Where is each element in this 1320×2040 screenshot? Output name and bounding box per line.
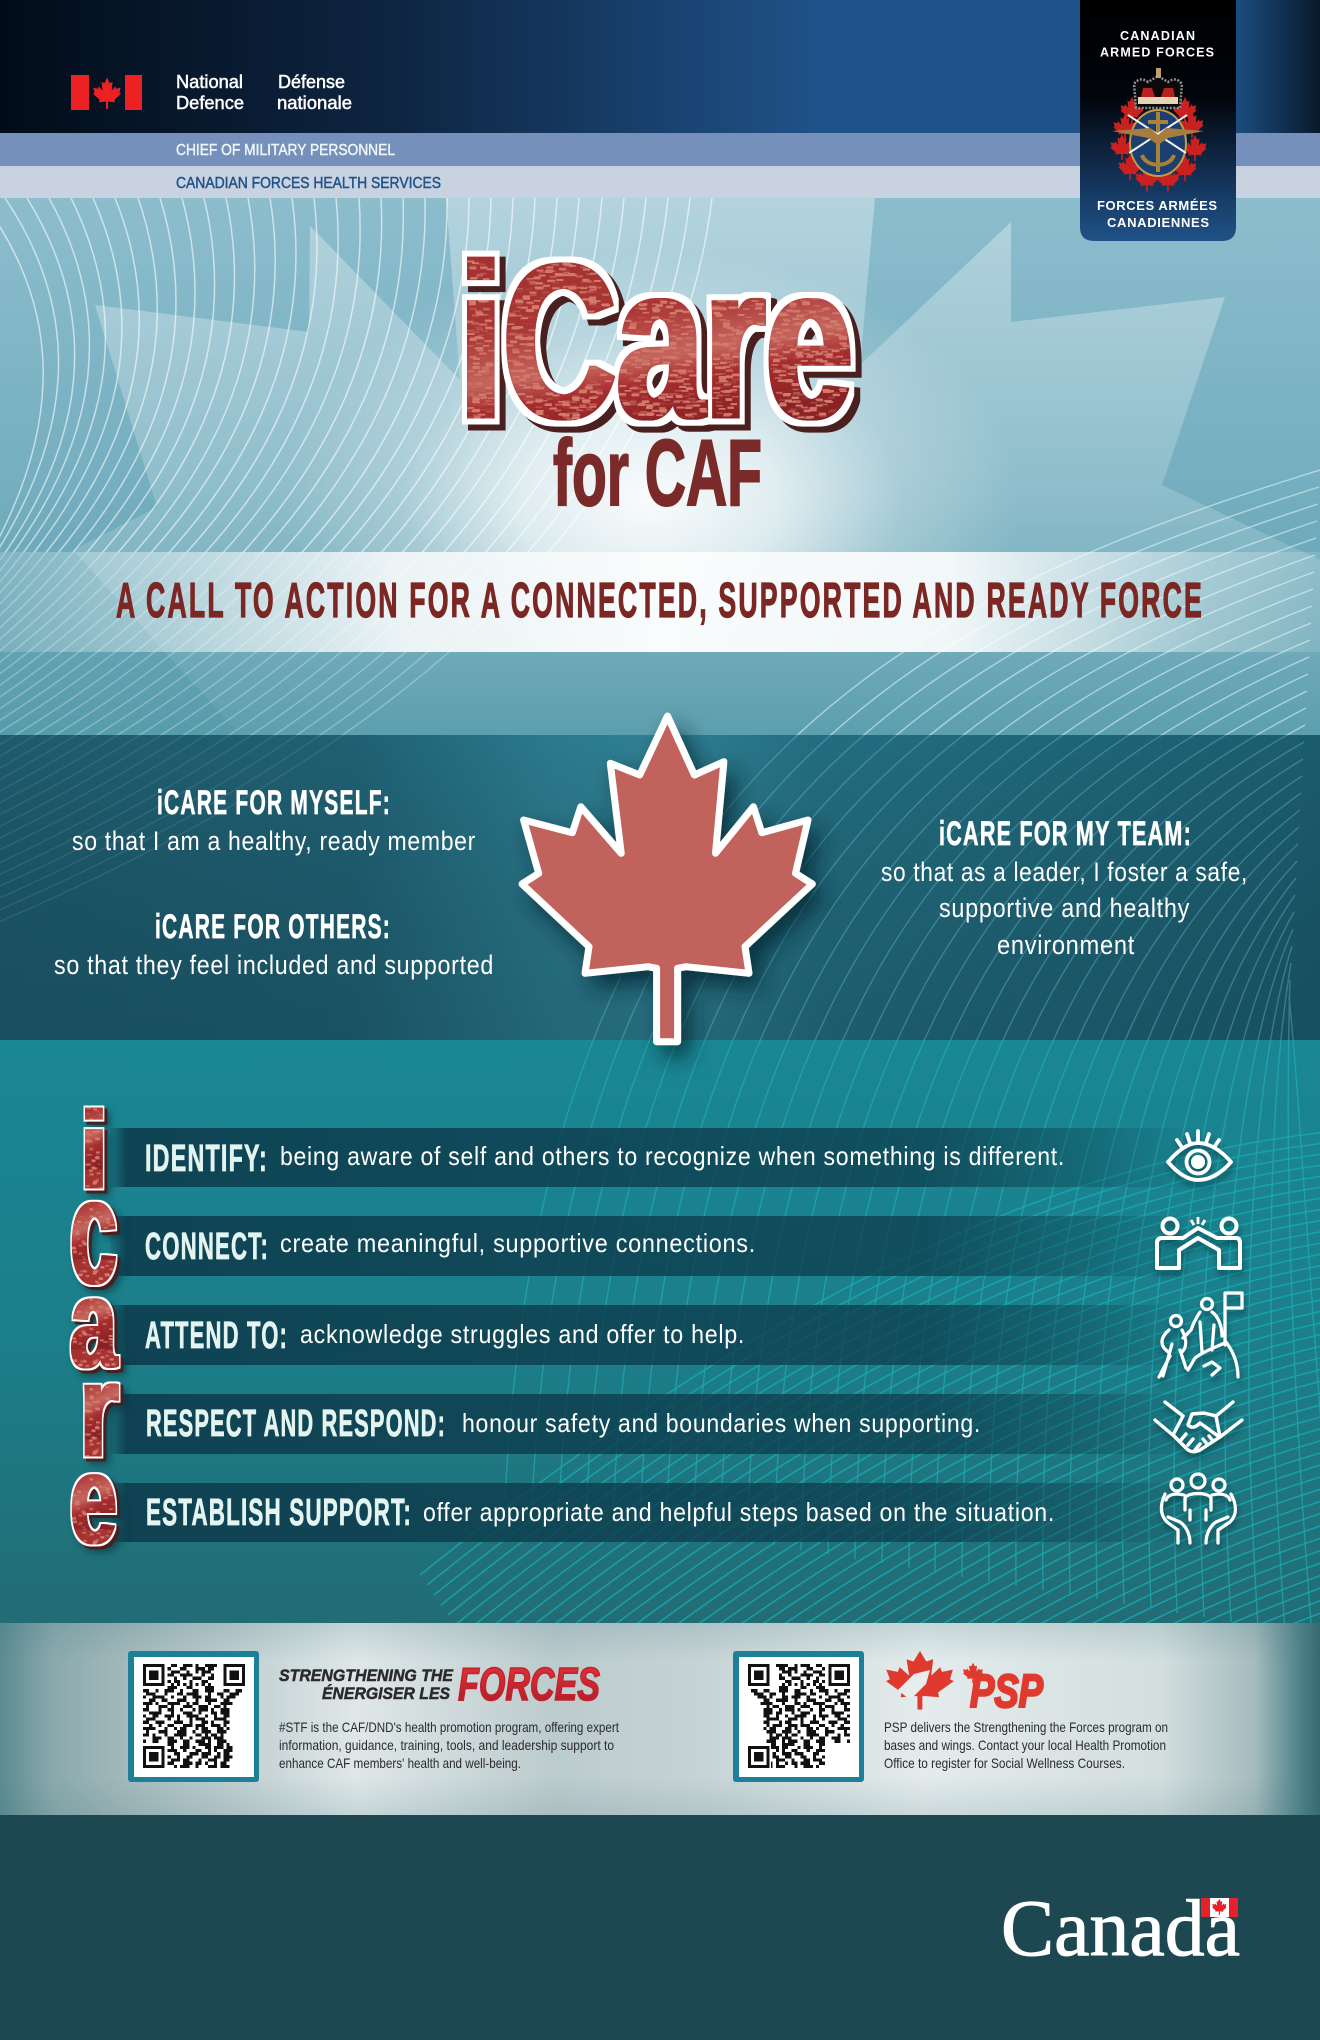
icon: people in hands xyxy=(1161,1474,1235,1543)
badge text bottom: FORCES ARMÉES xyxy=(1097,198,1217,213)
lower teal panel background xyxy=(0,1040,1320,1623)
acronym letters i c a r e: r xyxy=(79,1336,119,1485)
row: establish support: offer appropriate and helpful steps based on the situation. xyxy=(423,1497,1055,1527)
badge: canadian armed forces xyxy=(1080,0,1236,241)
text: iCare for myself: iCARE FOR MYSELF: xyxy=(157,784,391,822)
subtitle: for CAF: for CAF xyxy=(553,420,762,525)
logo: PSP xyxy=(886,1651,1043,1717)
logo: strengthening the forces: ÉNERGISER LES xyxy=(322,1684,451,1703)
crest xyxy=(1110,68,1207,191)
maple leaf xyxy=(522,716,812,1042)
row: establish support xyxy=(110,1483,1200,1542)
canada flag signature xyxy=(71,75,142,110)
department name xyxy=(176,72,352,113)
department name: nationale xyxy=(277,93,352,113)
text: iCare for my team xyxy=(881,815,1248,960)
footer band xyxy=(0,1815,1320,2040)
panel: dark band xyxy=(0,735,1320,1040)
badge text bottom: CANADIENNES xyxy=(1107,215,1209,230)
text: iCare for others xyxy=(54,908,494,980)
icon: high five xyxy=(1157,1217,1240,1268)
text: PSP description: bases and wings. Contact your local Health Promotion xyxy=(884,1737,1166,1753)
icon: eye xyxy=(1168,1131,1231,1180)
text: strengthening the forces description: #STF is the CAF/DND's health promotion program, offering expert xyxy=(279,1719,619,1735)
badge text bottom xyxy=(1097,198,1217,230)
icon: handshake xyxy=(1155,1402,1242,1452)
row: attend to: ATTEND TO: xyxy=(145,1315,288,1357)
logo: PSP: PSP xyxy=(970,1665,1043,1717)
row: connect: CONNECT: xyxy=(145,1226,269,1268)
chief of military personnel label: CHIEF OF MILITARY PERSONNEL xyxy=(176,142,395,159)
logo: strengthening the forces xyxy=(279,1658,600,1710)
text: strengthening the forces description: information, guidance, training, tools, and leadership support to xyxy=(279,1737,614,1753)
acronym letters i c a r e: e xyxy=(70,1429,117,1570)
row: attend to xyxy=(110,1305,1200,1365)
icon: climbers with flag xyxy=(1159,1293,1242,1377)
text: strengthening the forces description xyxy=(279,1719,619,1771)
logo: strengthening the forces: STRENGTHENING THE xyxy=(279,1666,454,1685)
row: respect and respond xyxy=(110,1394,1200,1454)
text: iCare for myself xyxy=(72,784,476,856)
row: respect and respond: RESPECT AND RESPOND: xyxy=(146,1403,446,1445)
logo: strengthening the forces: FORCES xyxy=(458,1658,600,1710)
QR code: PSP xyxy=(733,1651,864,1782)
text: PSP description xyxy=(884,1719,1168,1771)
text: iCare for others: iCARE FOR OTHERS: xyxy=(155,908,391,946)
badge text top: CANADIAN xyxy=(1120,29,1195,43)
badge text top xyxy=(1100,29,1214,60)
acronym letters i c a r e xyxy=(70,1089,119,1570)
text: iCare for others: so that they feel included and supported xyxy=(54,950,494,980)
hero background xyxy=(0,198,1320,735)
department name: Défense xyxy=(278,72,345,92)
row: identify: being aware of self and others to recognize when something is different. xyxy=(280,1141,1065,1171)
header bar xyxy=(0,0,1320,198)
text: PSP description: PSP delivers the Strengthening the Forces program on xyxy=(884,1719,1168,1735)
panel: resources strip xyxy=(0,1623,1320,1815)
banner strip xyxy=(0,552,1320,652)
text: strengthening the forces description: enhance CAF members' health and well-being. xyxy=(279,1755,521,1771)
row: respect and respond: honour safety and boundaries when supporting. xyxy=(462,1408,981,1438)
acronym letters i c a r e: i xyxy=(79,1089,109,1212)
title: iCare: iCare xyxy=(459,218,853,466)
text: iCare for my team: supportive and healthy xyxy=(939,893,1190,923)
row: connect: create meaningful, supportive connections. xyxy=(280,1228,756,1258)
department name: Defence xyxy=(176,93,244,113)
canadian forces health services label: CANADIAN FORCES HEALTH SERVICES xyxy=(176,175,441,192)
acronym letters i c a r e: c xyxy=(70,1147,117,1315)
row: connect xyxy=(110,1216,1200,1276)
text: PSP description: Office to register for Social Wellness Courses. xyxy=(884,1755,1125,1771)
text: iCare for my team: so that as a leader, I foster a safe, xyxy=(881,857,1248,887)
department name: National xyxy=(176,72,243,92)
text: iCare for myself: so that I am a healthy, ready member xyxy=(72,826,476,856)
acronym letters i c a r e: a xyxy=(70,1253,118,1394)
badge text top: ARMED FORCES xyxy=(1100,46,1214,60)
row: establish support: ESTABLISH SUPPORT: xyxy=(146,1492,412,1534)
row: attend to: acknowledge struggles and offer to help. xyxy=(300,1319,745,1349)
row: identify: IDENTIFY: xyxy=(145,1138,268,1180)
QR code: strengthening the forces xyxy=(128,1651,259,1782)
canada wordmark: Canada xyxy=(1001,1885,1240,1973)
row: identify xyxy=(110,1128,1200,1187)
text: iCare for my team: environment xyxy=(997,930,1135,960)
